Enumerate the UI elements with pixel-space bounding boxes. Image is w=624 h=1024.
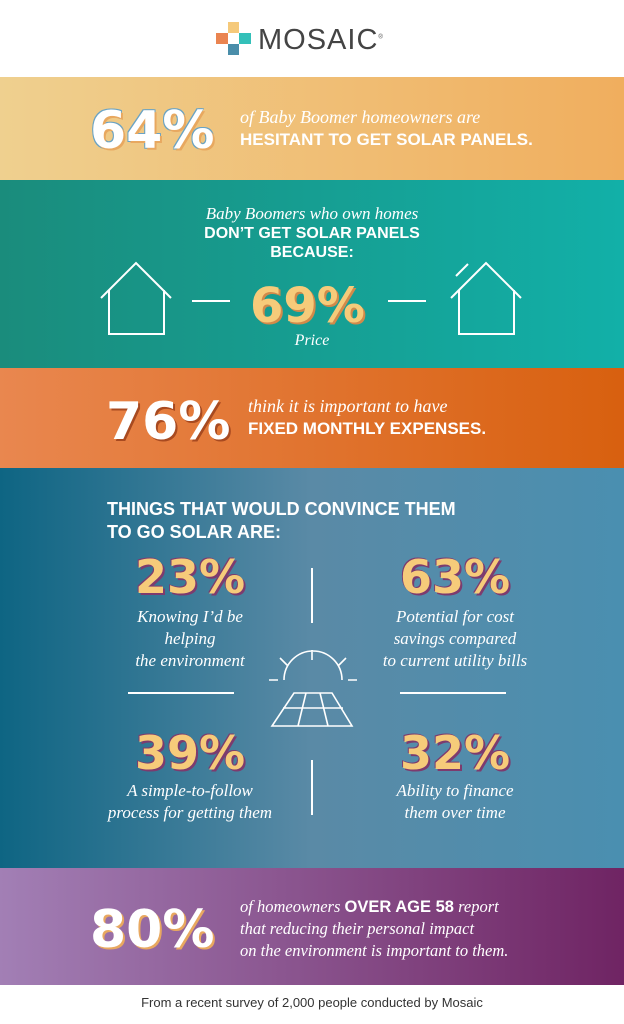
stat 32% xyxy=(396,726,514,822)
heading: THINGS THAT WOULD CONVINCE THEM xyxy=(107,499,456,519)
stat 63%: 63% xyxy=(400,550,510,604)
icon: house left xyxy=(100,262,172,335)
80% text: on the environment is important to them. xyxy=(240,941,508,960)
icon: house right xyxy=(450,262,522,335)
64% text xyxy=(240,107,533,149)
stat 39%: 39% xyxy=(135,726,245,780)
band: convince xyxy=(0,468,624,868)
76% text xyxy=(248,396,486,438)
stat 39% xyxy=(106,726,272,822)
stat 63% xyxy=(383,550,527,670)
heading: BECAUSE: xyxy=(270,244,354,261)
band: 64% xyxy=(0,77,624,180)
69%: 69% xyxy=(250,278,365,334)
stat 32%: them over time xyxy=(404,803,506,822)
stat 39%: process for getting them xyxy=(108,803,272,822)
76% text: FIXED MONTHLY EXPENSES. xyxy=(248,419,486,438)
stat 23%: Knowing I’d be xyxy=(137,607,243,626)
stat 23%: the environment xyxy=(135,651,245,670)
heading xyxy=(204,204,420,261)
stat 23%: helping xyxy=(164,629,216,648)
stat 32%: 32% xyxy=(400,726,510,780)
heading: DON’T GET SOLAR PANELS xyxy=(204,225,420,242)
price label: Price xyxy=(295,332,329,349)
76% text: think it is important to have xyxy=(248,396,448,416)
stat 23%: 23% xyxy=(135,550,245,604)
band: price xyxy=(0,180,624,368)
heading xyxy=(107,499,456,542)
band: 80% xyxy=(0,868,624,985)
stat 63%: savings compared xyxy=(394,629,516,648)
80% text: that reducing their personal impact xyxy=(240,919,474,938)
80% number: 80% xyxy=(90,900,214,960)
heading: Baby Boomers who own homes xyxy=(206,204,418,223)
64% text: HESITANT TO GET SOLAR PANELS. xyxy=(240,130,533,149)
band: 76% xyxy=(0,368,624,468)
heading: TO GO SOLAR ARE: xyxy=(107,522,281,542)
icon: solar xyxy=(269,650,357,727)
64% text: of Baby Boomer homeowners are xyxy=(240,107,480,127)
64% number: 64% xyxy=(90,101,214,161)
76% number: 76% xyxy=(106,392,230,452)
stat 32%: Ability to finance xyxy=(396,781,514,800)
footer: From a recent survey of 2,000 people conducted by Mosaic xyxy=(141,995,483,1010)
stat 23% xyxy=(135,550,246,670)
80% text xyxy=(240,897,508,960)
stat 63%: to current utility bills xyxy=(383,651,527,670)
logo: MOSAIC® xyxy=(258,24,384,56)
80% text: of homeowners OVER AGE 58 report xyxy=(240,897,499,916)
stat 63%: Potential for cost xyxy=(396,607,514,626)
stat 39%: A simple-to-follow xyxy=(127,781,253,800)
